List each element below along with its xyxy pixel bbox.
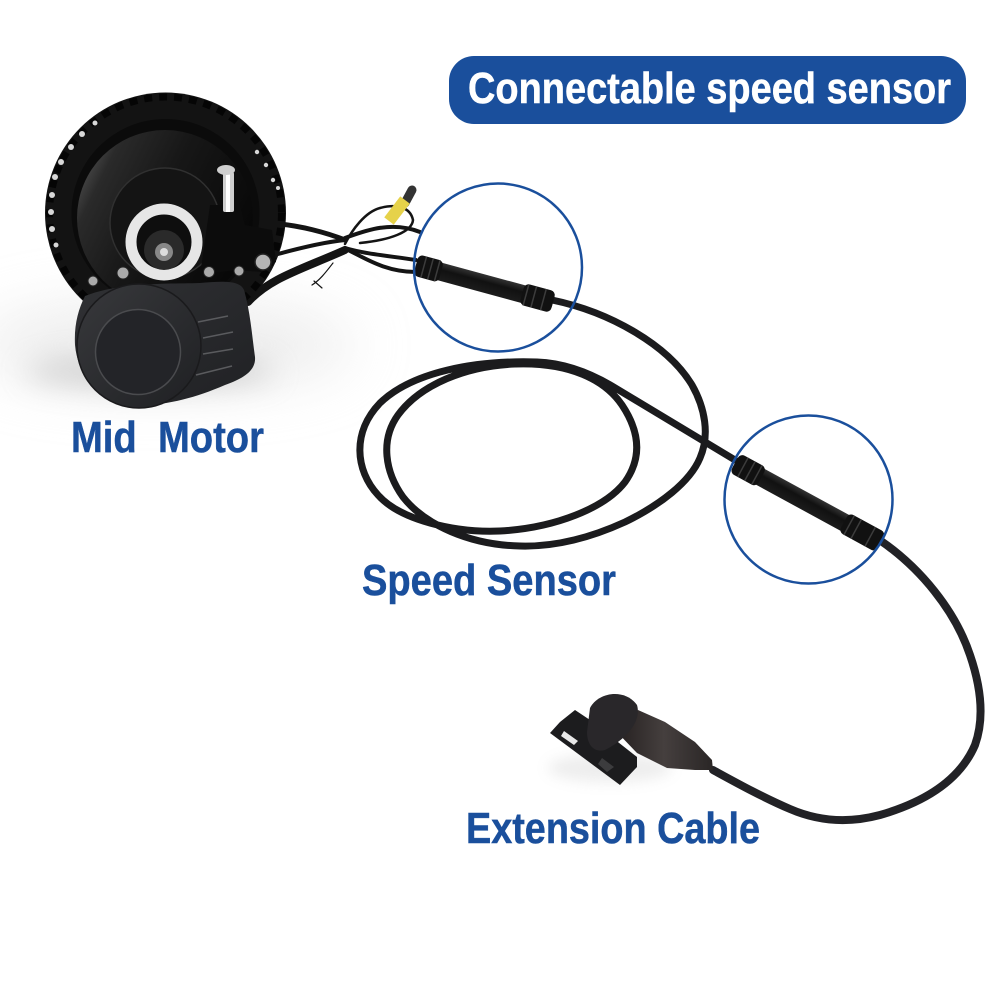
white bearing ring [131, 209, 197, 275]
label: mid motor: Mid Motor [71, 413, 264, 462]
motor wires [248, 206, 420, 302]
connector one [413, 254, 556, 313]
extension cable [713, 541, 981, 820]
motor ground shadow [0, 305, 672, 782]
sprocket [45, 92, 286, 334]
motor disc [77, 130, 253, 306]
icon: speed sensor head [550, 694, 713, 785]
axle [144, 230, 184, 270]
speed sensor cable coil [360, 300, 735, 546]
motor cover [77, 284, 201, 408]
sensor mount plate [550, 710, 637, 785]
connector two [730, 453, 886, 552]
highlight circle two [724, 416, 892, 584]
bracket and bolt [88, 165, 276, 286]
motor inner ring [110, 168, 220, 278]
label: speed sensor: Speed Sensor [362, 556, 616, 605]
sensor body [615, 710, 713, 770]
yellow connector [389, 190, 412, 221]
highlight circle one [414, 184, 582, 352]
sensor cap [587, 694, 638, 751]
icon: mid motor [45, 92, 286, 408]
housing ribs [196, 316, 233, 375]
title pill [449, 56, 966, 124]
motor housing [75, 282, 255, 406]
motor cover centre [96, 310, 180, 394]
label: extension cable: Extension Cable [466, 804, 760, 853]
